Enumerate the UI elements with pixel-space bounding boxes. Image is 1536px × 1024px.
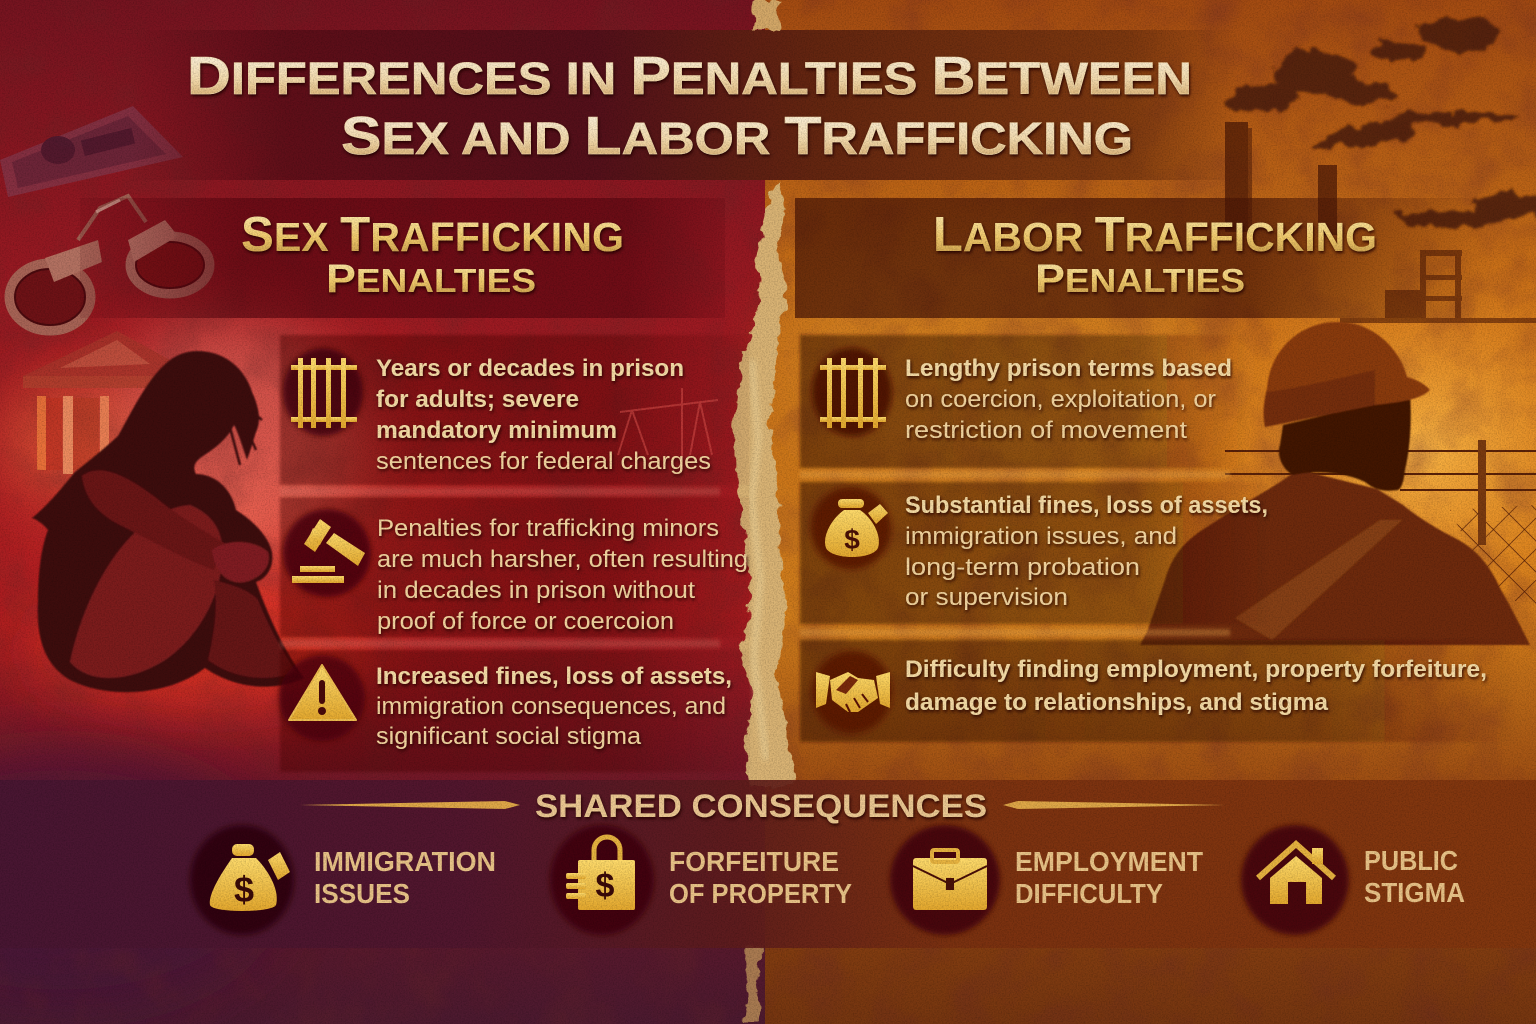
torn paper divider — [734, 0, 794, 1024]
item: employment difficulty: DIFFICULTY — [1015, 878, 1163, 909]
item: public stigma: STIGMA — [1364, 877, 1465, 908]
background: left red half — [0, 0, 775, 1024]
text: sex trafficking item 2 with gavel icon: Penalties for trafficking minors — [377, 515, 719, 542]
title: DIFFERENCES IN PENALTIES BETWEEN — [187, 46, 1192, 106]
text: sex trafficking item 1 with bars icon: for adults; severe — [376, 386, 579, 413]
item: immigration issues: ISSUES — [314, 878, 410, 909]
icon: warning triangle — [289, 665, 356, 720]
illustration: barbed wire fence — [1225, 440, 1536, 610]
title: SEX AND LABOR TRAFFICKING — [341, 106, 1133, 166]
item: employment difficulty: EMPLOYMENT — [1015, 846, 1203, 877]
item: immigration issues: $ — [234, 869, 254, 910]
illustration: seated woman silhouette — [32, 351, 304, 692]
heading: labor trafficking penalties: LABOR TRAFFICKING — [933, 208, 1377, 262]
icon: handshake — [816, 672, 890, 712]
text: labor trafficking item 1 with bars icon: restriction of movement — [905, 417, 1187, 444]
heading: labor trafficking penalties — [933, 208, 1377, 301]
item: public stigma: PUBLIC — [1364, 845, 1458, 876]
background: right orange half — [765, 0, 1536, 1024]
heading: shared consequences: SHARED CONSEQUENCES — [535, 788, 987, 824]
illustration: factory chimneys, smoke and refinery — [1220, 16, 1536, 323]
text: sex trafficking item 2 with gavel icon: are much harsher, often resulting — [377, 546, 748, 573]
text: labor trafficking item 1 with bars icon: on coercion, exploitation, or — [905, 386, 1216, 413]
heading: sex trafficking penalties: SEX TRAFFICKING — [241, 208, 624, 262]
illustration: handcuffs — [10, 196, 209, 330]
icon: money bag — [825, 499, 888, 557]
text: sex trafficking item 1 with bars icon: mandatory minimum — [376, 417, 617, 444]
arrow: left ornament — [300, 801, 520, 809]
text: sex trafficking item 3 with warning icon: significant social stigma — [376, 723, 642, 750]
text: labor trafficking item 3 with handshake icon: damage to relationships, and stigma — [905, 689, 1329, 716]
item: immigration issues: IMMIGRATION — [314, 846, 496, 877]
text: sex trafficking item 3 with warning icon: Increased fines, loss of assets, — [376, 663, 732, 690]
text: labor trafficking item 2 with money bag icon: Substantial fines, loss of assets, — [905, 492, 1268, 519]
text: sex trafficking item 3 with warning icon — [279, 655, 732, 750]
illustration: faint scales of justice — [618, 388, 718, 470]
icon: prison bars — [291, 358, 357, 428]
text: labor trafficking item 1 with bars icon — [812, 348, 1232, 444]
heading: labor trafficking penalties: PENALTIES — [1035, 257, 1245, 301]
item: forfeiture of property — [550, 825, 852, 935]
illustration: dollar bill — [0, 106, 183, 197]
title — [187, 46, 1192, 166]
text: sex trafficking item 1 with bars icon: Years or decades in prison — [376, 355, 684, 382]
text: labor trafficking item 3 with handshake icon: Difficulty finding employment, property forfeiture, — [905, 656, 1487, 683]
title band — [130, 30, 1240, 180]
text: labor trafficking item 2 with money bag icon — [811, 487, 1268, 611]
heading: sex trafficking penalties: PENALTIES — [326, 257, 536, 301]
text: labor trafficking item 2 with money bag icon: immigration issues, and — [905, 523, 1177, 550]
panel: labor trafficking rows — [800, 335, 1520, 742]
item: forfeiture of property: FORFEITURE — [669, 846, 839, 877]
text: sex trafficking item 1 with bars icon: sentences for federal charges — [376, 448, 711, 475]
panel: shared consequences — [0, 780, 1536, 948]
icon: money bag: $ — [844, 524, 860, 555]
illustration: hard-hat worker silhouette — [1140, 322, 1530, 645]
item: public stigma — [1241, 825, 1465, 935]
text: labor trafficking item 1 with bars icon: Lengthy prison terms based — [905, 355, 1232, 382]
text: labor trafficking item 3 with handshake icon — [812, 651, 1487, 733]
arrow: right ornament — [1003, 801, 1225, 809]
item: immigration issues — [190, 825, 496, 935]
icon: gavel — [292, 519, 365, 583]
item: employment difficulty — [890, 825, 1203, 935]
text: labor trafficking item 2 with money bag icon: or supervision — [905, 584, 1068, 611]
text: sex trafficking item 2 with gavel icon: proof of force or coercoion — [377, 608, 674, 635]
text: sex trafficking item 2 with gavel icon — [283, 509, 748, 635]
heading: sex trafficking penalties — [241, 208, 624, 301]
illustration: courthouse — [23, 331, 173, 474]
text: labor trafficking item 2 with money bag icon: long-term probation — [905, 554, 1140, 581]
text: sex trafficking item 3 with warning icon: immigration consequences, and — [376, 693, 726, 720]
item: forfeiture of property: OF PROPERTY — [669, 878, 852, 909]
panel: sex trafficking rows — [280, 335, 750, 772]
text: sex trafficking item 1 with bars icon — [283, 348, 711, 475]
item: forfeiture of property: $ — [596, 867, 615, 905]
text: sex trafficking item 2 with gavel icon: in decades in prison without — [377, 577, 695, 604]
icon: prison bars — [820, 358, 886, 428]
section heading bands — [80, 198, 1495, 318]
